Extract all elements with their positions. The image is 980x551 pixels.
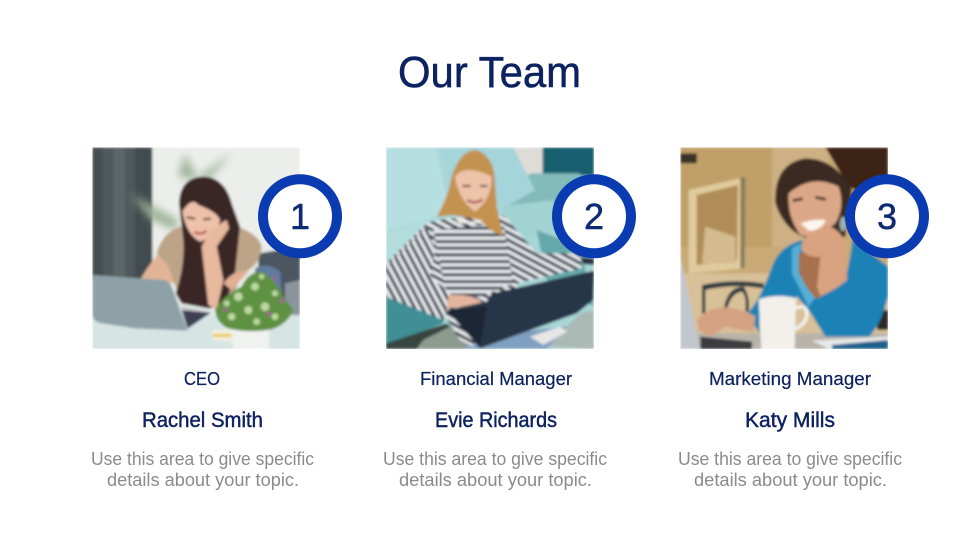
description 2 [383,449,607,490]
number badge 3 [850,179,924,253]
description 3 [678,449,902,490]
photo: woman in striped top on sofa [386,147,594,349]
number badge 1 [263,179,337,253]
number badge 3: 3 [877,196,897,237]
title: Our Team [398,48,581,97]
role: Financial Manager: Financial Manager [420,369,572,389]
description 1: Use this area to give specific [91,449,314,469]
number badge 2 [557,179,631,253]
description 2: Use this area to give specific [383,449,607,469]
photo: woman at laptop with plant [92,147,300,349]
description 1: details about your topic. [107,470,299,490]
number badge 1: 1 [290,196,310,237]
description 1 [91,449,314,490]
description 2: details about your topic. [399,470,592,490]
description 3: details about your topic. [694,470,887,490]
team member 3 [678,147,924,490]
name: Evie Richards: Evie Richards [435,409,557,432]
team member 1 [91,147,337,490]
name: Katy Mills: Katy Mills [745,409,835,432]
photo: woman in blue shirt with mug [680,147,888,349]
description 3: Use this area to give specific [678,449,902,469]
number badge 2: 2 [584,196,604,237]
name: Rachel Smith: Rachel Smith [142,409,263,432]
role: Marketing Manager: Marketing Manager [709,369,871,389]
role: CEO: CEO [184,369,220,389]
team member 2 [383,147,631,490]
